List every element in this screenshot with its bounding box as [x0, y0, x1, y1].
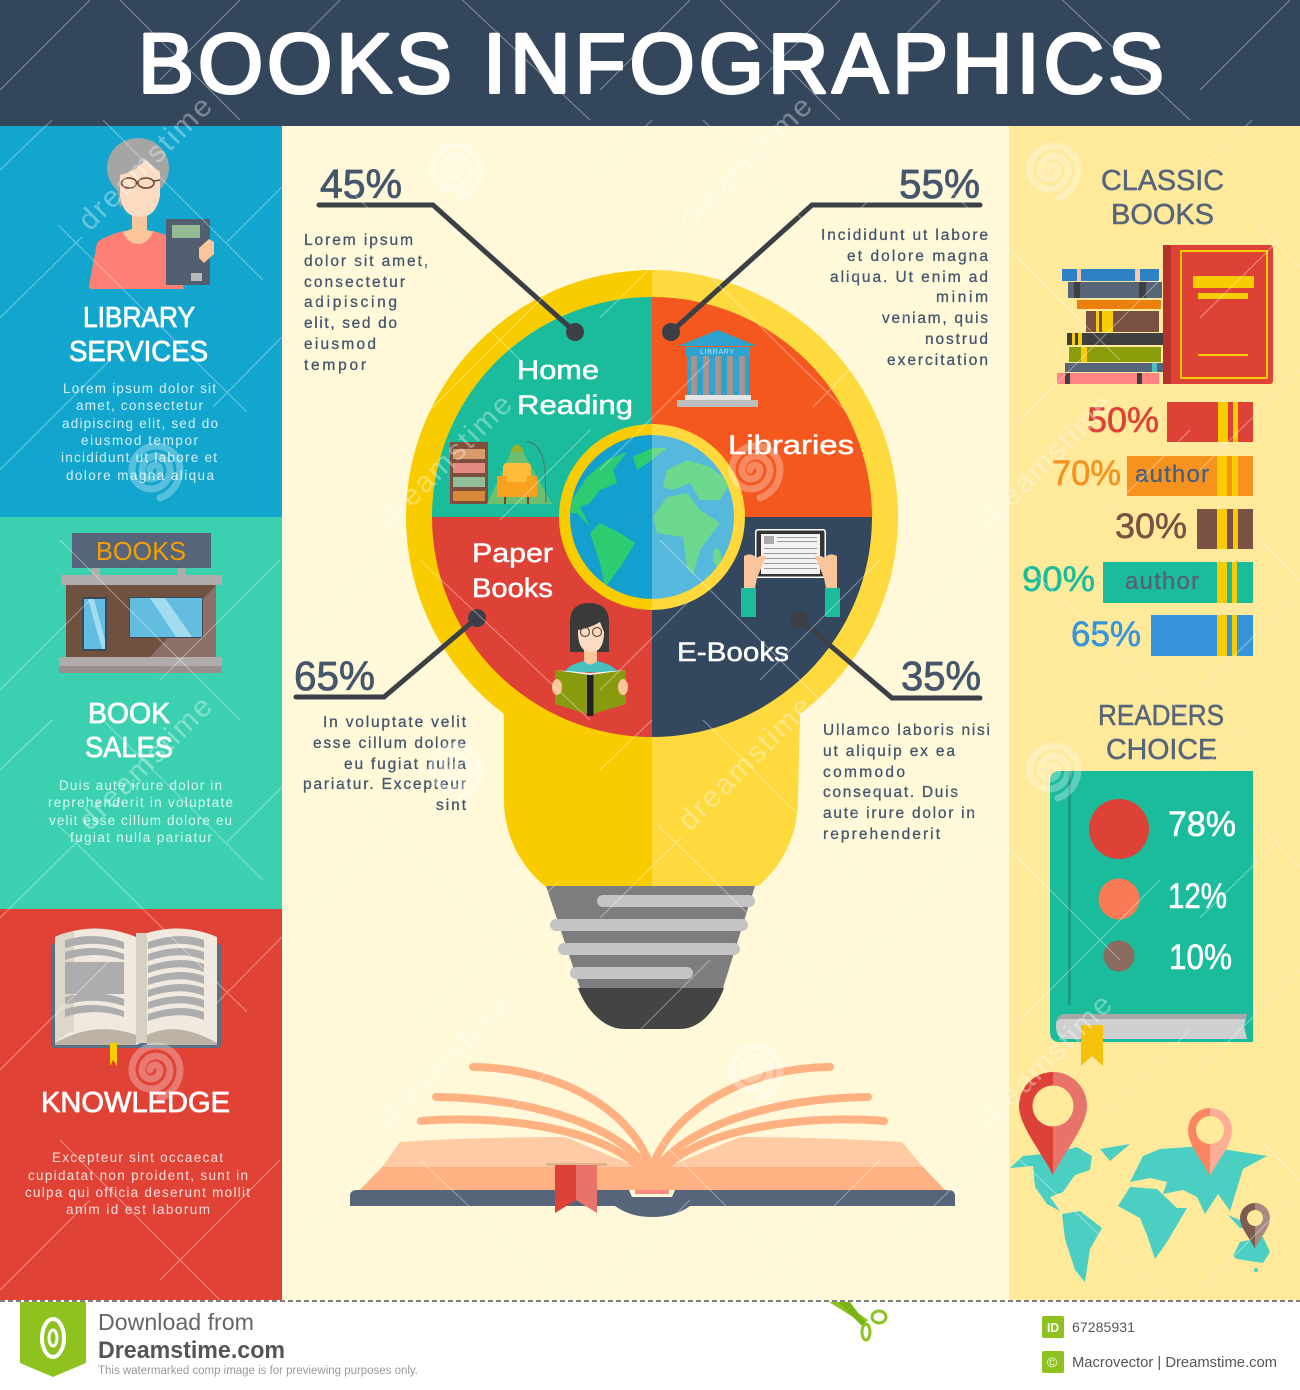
bar: 90%: 90%	[1022, 560, 1095, 599]
callout: 45% home reading: elit, sed do	[304, 315, 397, 332]
watermark overlay: dreamstime	[372, 388, 519, 535]
pin: red	[1019, 1072, 1087, 1175]
pin: brown	[1240, 1203, 1270, 1249]
text block: book sales: reprehenderit in voluptate	[48, 795, 233, 810]
icon: bookstore	[59, 533, 222, 673]
text block: library services	[61, 381, 218, 483]
panel: readers choice book	[1050, 771, 1253, 1066]
heading: readers choice: CHOICE	[1106, 734, 1217, 766]
bulb screw base	[546, 886, 755, 1029]
bookmark	[1081, 1025, 1103, 1066]
footer id	[1042, 1316, 1135, 1338]
icon: green ribbon	[20, 1302, 86, 1377]
icon: reader with book	[552, 603, 628, 716]
panel: knowledge	[0, 909, 282, 1300]
bulb glass right half	[652, 270, 898, 886]
callout: 35% e-books: aute irure dolor in	[823, 805, 975, 822]
callout: 35% e-books: consequat. Duis	[823, 784, 958, 801]
bookmark	[546, 1163, 607, 1213]
heading: book sales: BOOK	[88, 698, 171, 730]
icon: open book	[51, 928, 221, 1066]
bar: 70%: author	[1135, 461, 1209, 488]
heading: library services	[69, 302, 208, 368]
text block: library services: Lorem ipsum dolor sit	[63, 381, 216, 396]
callout: 55% libraries: exercitation	[887, 352, 988, 369]
callout: 45% home reading: 45%	[320, 161, 402, 207]
stat: 12%	[1098, 877, 1227, 920]
callout: 65% paper books: esse cillum dolore	[313, 735, 466, 752]
heading: readers choice: READERS	[1098, 700, 1224, 732]
watermark overlay: dreamstime	[72, 690, 219, 837]
fanned pages	[421, 1067, 884, 1170]
icon: library building: LIBRARY	[700, 349, 734, 356]
callout: 55% libraries: 55%	[899, 161, 980, 207]
stat: 78%	[1089, 799, 1236, 859]
text block: knowledge: culpa qui officia deserunt mollit	[25, 1185, 250, 1200]
pie: four reading channels	[432, 297, 872, 737]
callout: 45% home reading: dolor sit amet,	[304, 253, 428, 270]
icon: librarian	[89, 138, 214, 289]
callout: 55% libraries: minim	[936, 289, 988, 306]
map continents	[1010, 1144, 1270, 1282]
segment: paper books: Paper	[472, 538, 553, 568]
segment: paper books	[432, 517, 652, 737]
text block: library services: dolore magna aliqua	[66, 468, 214, 483]
callout: 45% home reading: consectetur	[304, 274, 405, 291]
callout: 65% paper books	[294, 609, 486, 814]
heading: book sales: SALES	[85, 732, 173, 764]
footer: dreamstime strip	[0, 1300, 1300, 1390]
callout: 45% home reading: tempor	[304, 357, 366, 374]
heading: readers choice	[1098, 700, 1224, 766]
callout: 35% e-books: Ullamco laboris nisi	[823, 722, 990, 739]
callout: 35% e-books: ut aliquip ex ea	[823, 743, 955, 760]
text block: book sales: velit esse cillum dolore eu	[49, 813, 232, 828]
segment: e-books	[652, 517, 872, 737]
heading: classic books: CLASSIC	[1101, 165, 1224, 197]
bar: 30%	[1115, 507, 1253, 549]
footer brand text: This watermarked comp image is for previewing purposes only.	[98, 1365, 418, 1377]
footer id: 67285931	[1072, 1319, 1135, 1335]
text block: library services: adipiscing elit, sed do	[62, 416, 218, 431]
bar: 50%	[1087, 401, 1253, 442]
watermark overlay: dreamstime	[672, 90, 819, 237]
stat: 10%: 10%	[1169, 938, 1232, 977]
icon: armchair and lamp	[487, 442, 552, 504]
callout: 65% paper books: sint	[436, 797, 467, 814]
text block: knowledge: anim id est laborum	[66, 1202, 210, 1217]
title: BOOKS INFOGRAPHICS	[138, 16, 1164, 110]
panel: right column background	[1009, 126, 1300, 1300]
panel: library services	[0, 126, 282, 517]
text block: book sales: fugiat nulla pariatur	[70, 830, 212, 845]
icon: scissors	[829, 1302, 886, 1340]
callout: 55% libraries: nostrud	[925, 331, 988, 348]
callout: 35% e-books: commodo	[823, 764, 905, 781]
text block: knowledge	[25, 1150, 250, 1217]
watermark overlay: dreamstime	[972, 388, 1119, 535]
watermark overlay: dreamstime	[672, 690, 819, 837]
footer brand text	[98, 1309, 418, 1377]
callout: 65% paper books: 65%	[294, 653, 375, 699]
bar: 65%: 65%	[1071, 615, 1141, 654]
callout: 55% libraries	[662, 161, 988, 369]
watermark overlay: dreamstime	[972, 988, 1119, 1135]
text block: book sales: Duis aute irure dolor in	[59, 778, 222, 793]
heading: library services: LIBRARY	[83, 302, 195, 334]
bar: 70%: 70%	[1052, 454, 1121, 493]
segment: home reading: Reading	[517, 390, 633, 420]
text block: knowledge: cupidatat non proident, sunt in	[28, 1168, 248, 1183]
book pages	[382, 1137, 637, 1167]
callout: 45% home reading: Lorem ipsum	[304, 232, 413, 249]
stat: 12%: 12%	[1168, 877, 1227, 916]
icon: red classic book	[1163, 245, 1273, 384]
callout: 45% home reading: adipiscing	[304, 294, 397, 311]
icon: tablet in hands	[741, 529, 840, 617]
text block: library services: eiusmod tempor	[81, 433, 198, 448]
bar: 70%	[1052, 454, 1253, 496]
bar: 90%	[1022, 560, 1253, 603]
bar chart: classic book shares	[1022, 401, 1253, 656]
panel: central cream background	[282, 126, 1009, 1300]
header band	[0, 0, 1300, 126]
callout: 55% libraries: et dolore magna	[847, 248, 988, 265]
segment: libraries: Libraries	[728, 430, 854, 460]
bar: 50%: 50%	[1087, 401, 1159, 440]
segment: e-books: E-Books	[677, 637, 789, 667]
light bulb	[406, 270, 898, 1029]
world map with pins	[1010, 1072, 1270, 1282]
globe	[559, 424, 745, 610]
heading: classic books: BOOKS	[1111, 199, 1214, 231]
callout: 65% paper books: In voluptate velit	[323, 714, 467, 731]
callout: 55% libraries: veniam, quis	[882, 310, 988, 327]
footer credit	[1042, 1351, 1277, 1373]
footer id: ID	[1047, 1320, 1059, 1335]
footer brand text: Dreamstime.com	[98, 1337, 285, 1364]
footer credit: Macrovector | Dreamstime.com	[1072, 1355, 1277, 1371]
callout: 45% home reading: eiusmod	[304, 336, 376, 353]
heading: knowledge: KNOWLEDGE	[41, 1087, 230, 1119]
footer brand text: Download from	[98, 1309, 254, 1335]
bar: 90%: author	[1125, 568, 1199, 595]
callout: 45% home reading	[304, 161, 584, 374]
heading: library services: SERVICES	[69, 336, 208, 368]
open book at bottom	[350, 1067, 955, 1217]
callout: 55% libraries: aliqua. Ut enim ad	[830, 269, 988, 286]
callout: 55% libraries: Incididunt ut labore	[821, 227, 988, 244]
text block: library services: incididunt ut labore et	[61, 450, 217, 465]
callout: 65% paper books: pariatur. Excepteur	[303, 776, 466, 793]
callout: 35% e-books: 35%	[901, 653, 981, 699]
sign text: BOOKS	[96, 536, 186, 566]
callout: 65% paper books: eu fugiat nulla	[344, 756, 466, 773]
callout: 35% e-books	[790, 610, 990, 843]
callout: 35% e-books: reprehenderit	[823, 826, 941, 843]
book cover	[350, 1190, 955, 1217]
text block: book sales	[48, 778, 233, 845]
bar: 30%: 30%	[1115, 507, 1187, 546]
text block: library services: amet, consectetur	[76, 398, 204, 413]
stat: 78%: 78%	[1168, 805, 1236, 844]
segment: libraries	[652, 297, 872, 517]
pin: orange	[1188, 1108, 1232, 1176]
panel: book sales	[0, 517, 282, 909]
segment: home reading: Home	[517, 355, 599, 385]
segment: paper books: Books	[472, 573, 553, 603]
text block: knowledge: Excepteur sint occaecat	[52, 1150, 223, 1165]
footer credit: ©	[1047, 1354, 1058, 1370]
watermark overlay: dreamstime	[72, 90, 219, 237]
icon: stack of books	[1057, 269, 1163, 384]
segment: home reading	[432, 297, 652, 517]
icon: bookshelf	[450, 442, 488, 504]
watermark overlay: dreamstime	[372, 988, 519, 1135]
icon: library building	[677, 330, 758, 407]
bulb glass left half	[406, 270, 652, 886]
stat: 10%	[1104, 938, 1232, 977]
heading: classic books	[1101, 165, 1224, 231]
bar: 65%	[1071, 615, 1253, 656]
heading: book sales	[85, 698, 173, 764]
